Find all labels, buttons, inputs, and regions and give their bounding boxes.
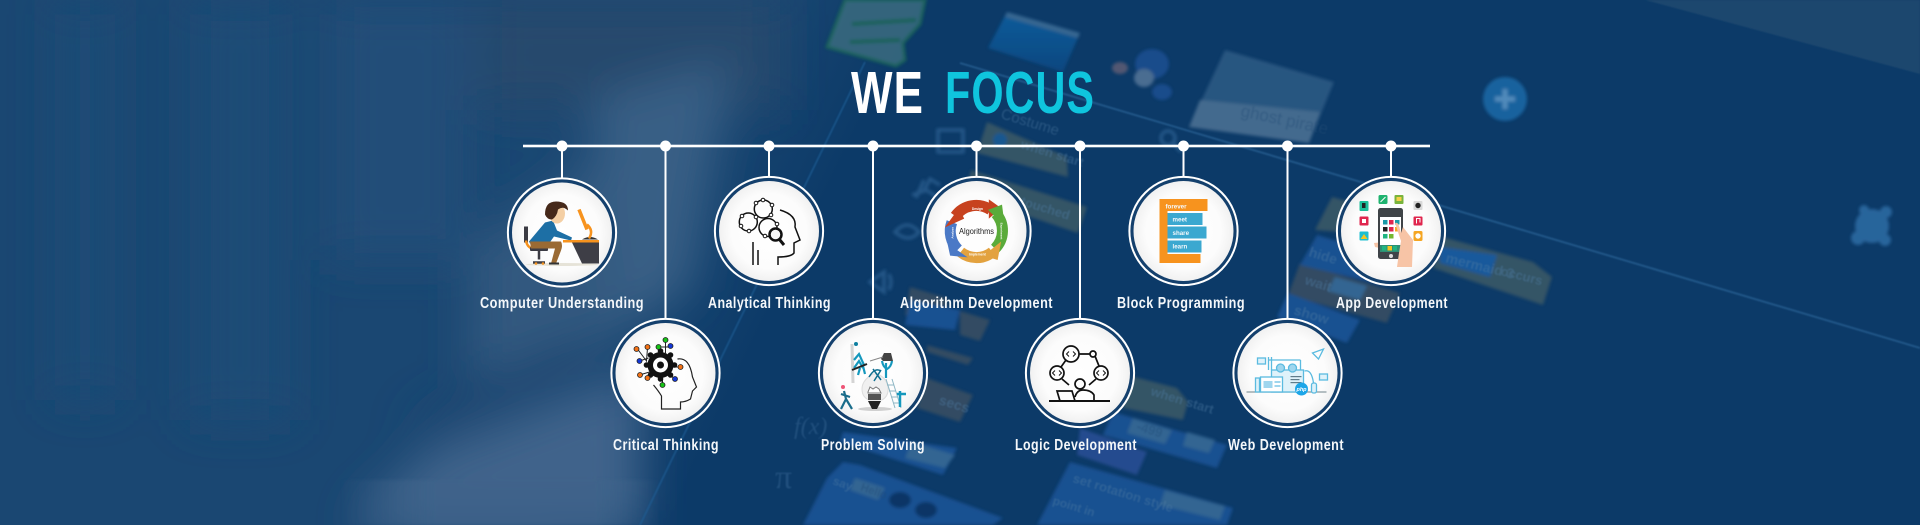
background: blurred code text: point in <box>1051 493 1097 520</box>
background: blurred code text: Costume <box>999 106 1061 139</box>
icon: lightbulb and workers <box>819 319 927 427</box>
background: blurred code text: secs <box>937 392 972 416</box>
icon: person with logic nodes <box>1026 319 1134 427</box>
icon: algorithm cycle: Algorithms <box>959 227 994 236</box>
item: Problem Solving <box>819 319 927 454</box>
label: Logic Development <box>1015 437 1137 454</box>
background: blurred code text: Hello <box>859 482 889 502</box>
background: blurred code text: say <box>831 474 855 494</box>
lighter inputs <box>850 277 1367 520</box>
item: Logic Development <box>1015 319 1137 454</box>
label: Algorithm Development <box>900 295 1053 312</box>
olive blocks <box>965 122 1552 420</box>
item: Critical Thinking <box>611 319 720 454</box>
background: blurred code text: set rotation style <box>1071 471 1175 515</box>
title <box>851 60 1095 126</box>
icon: head with gear <box>611 319 720 427</box>
background: blurred coding blocks <box>803 0 1892 525</box>
item: App Development <box>1336 177 1448 312</box>
item: Web Development <box>1228 319 1344 454</box>
background: blurred code text: when start <box>1018 136 1086 170</box>
label: Analytical Thinking <box>708 295 831 312</box>
background: blurred code text: when start <box>1148 383 1216 417</box>
background: blurred code text: occurs <box>1499 263 1544 288</box>
background: blurred code text: mermaid 3 <box>1444 249 1516 282</box>
icon: algorithm cycle: Implement <box>969 253 987 257</box>
icon: algorithm cycle: Experiment <box>999 223 1003 239</box>
background: blurred code text <box>775 101 1544 520</box>
background: blurred code text: π <box>775 459 792 496</box>
blue blocks <box>803 235 1497 525</box>
background: blurred code text: -499 <box>1135 419 1164 440</box>
label: Web Development <box>1228 437 1344 454</box>
background: blurred code text: hide <box>1307 244 1340 267</box>
icon: phone with apps <box>1337 177 1445 285</box>
icon: algorithm cycle: Design <box>972 207 983 211</box>
background: blurred code text: f(x) <box>794 414 827 440</box>
item: Block Programming <box>1117 177 1245 312</box>
label: App Development <box>1336 295 1448 312</box>
icon: code blocks: learn <box>1172 244 1188 250</box>
icon: person at computer <box>508 178 616 287</box>
background: blurred code text: touched <box>1019 194 1072 223</box>
icon: code blocks: forever <box>1166 204 1187 210</box>
background: blurred code text: show <box>1292 302 1331 327</box>
icon: algorithm cycle: Analyze <box>951 227 955 239</box>
background: blurred code text: ghost pirate <box>1239 101 1330 138</box>
label: Critical Thinking <box>613 437 719 454</box>
icon: code blocks: meet <box>1172 216 1187 224</box>
item: Computer Understanding <box>480 178 644 312</box>
label: Problem Solving <box>821 437 925 454</box>
timeline bar <box>523 140 1430 319</box>
label: Block Programming <box>1117 295 1245 312</box>
icon: algorithm cycle <box>922 177 1031 285</box>
sidebar glyphs <box>870 130 1181 292</box>
label: Computer Understanding <box>480 295 644 312</box>
background: blurred code text: wait <box>1302 271 1334 295</box>
icon: web development scene: php <box>1295 387 1307 393</box>
icon: code blocks <box>1129 177 1238 285</box>
item: Analytical Thinking <box>708 177 831 312</box>
item: Algorithm Development <box>900 177 1053 312</box>
title: WE <box>851 60 924 126</box>
brown blocks <box>905 263 1400 422</box>
icon: head with molecules and magnifier <box>715 177 823 285</box>
icon: code blocks: share <box>1172 230 1190 237</box>
title: FOCUS <box>945 60 1095 126</box>
